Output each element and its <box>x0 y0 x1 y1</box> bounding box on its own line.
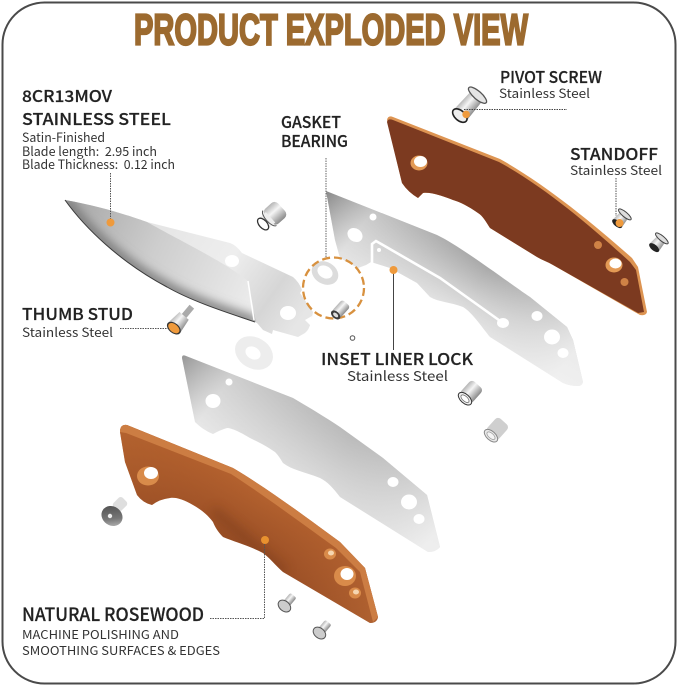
label: natural rosewood: SMOOTHING SURFACES & EDGES <box>22 642 220 659</box>
leader: liner lock <box>390 266 398 350</box>
label: standoff <box>570 141 662 179</box>
gasket bearing washer upper <box>307 256 343 290</box>
lower rosewood handle <box>120 425 378 623</box>
label: natural rosewood: NATURAL ROSEWOOD <box>22 601 204 627</box>
standoff part <box>609 207 633 231</box>
label: blade steel: Blade Thickness: 0.12 inch <box>22 154 175 173</box>
label: thumb stud <box>22 301 133 341</box>
label: thumb stud: THUMB STUD <box>22 301 133 325</box>
leader: thumb stud <box>120 328 168 330</box>
spacer top <box>253 200 288 234</box>
small screw two <box>311 618 334 641</box>
spacer pin in circle <box>329 299 350 321</box>
label: blade steel: STAINLESS STEEL <box>22 106 171 130</box>
gasket bearing dashed circle <box>303 258 364 318</box>
label: gasket bearing <box>281 109 348 152</box>
knife blade <box>65 200 313 337</box>
label: pivot screw <box>499 64 602 102</box>
leader: gasket <box>325 158 327 258</box>
label: inset liner lock: Stainless Steel <box>347 365 448 385</box>
label: pivot screw: Stainless Steel <box>499 83 590 102</box>
label: inset liner lock <box>321 346 473 385</box>
label: natural rosewood <box>22 601 220 659</box>
label: standoff: STANDOFF <box>570 141 658 165</box>
lower right spacer two <box>482 416 510 444</box>
lower steel liner <box>182 355 440 552</box>
thumb stud part <box>165 302 198 337</box>
small screw one <box>276 591 299 614</box>
lower right spacer one <box>456 379 484 407</box>
tiny ball <box>350 336 355 340</box>
upper steel liner with inset lock <box>326 191 583 386</box>
label: standoff: Stainless Steel <box>570 160 662 179</box>
leader: rosewood <box>210 536 269 618</box>
label: blade steel: Satin-Finished <box>22 127 105 146</box>
label: thumb stud: Stainless Steel <box>22 322 113 341</box>
label: pivot screw: PIVOT SCREW <box>500 64 602 88</box>
second standoff part <box>646 231 670 255</box>
upper rosewood handle <box>387 116 647 315</box>
leader: blade <box>106 173 114 226</box>
label: natural rosewood: MACHINE POLISHING AND <box>22 626 179 643</box>
leader: pivot screw <box>464 108 567 110</box>
label: blade steel <box>22 83 175 173</box>
label: inset liner lock: INSET LINER LOCK <box>321 346 473 370</box>
gasket bearing washer lower <box>229 330 279 376</box>
label: blade steel: 8CR13MOV <box>22 83 113 107</box>
label: blade steel: Blade length: 2.95 inch <box>22 141 157 160</box>
leader: standoff <box>615 178 617 216</box>
label: gasket bearing: BEARING <box>281 128 348 152</box>
lower left torx screw <box>98 496 128 530</box>
pivot screw part <box>448 85 489 127</box>
label: gasket bearing: GASKET <box>281 109 341 133</box>
